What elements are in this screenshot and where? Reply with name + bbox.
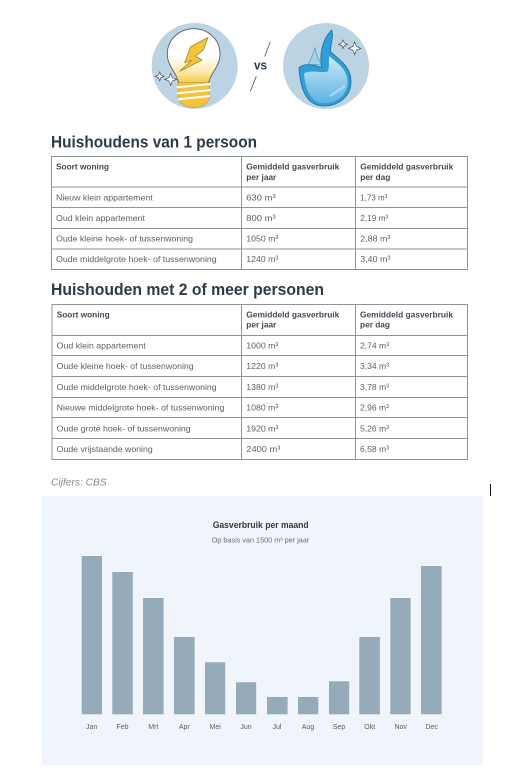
bar chart xyxy=(82,556,442,714)
table: households of 1 person: 2,19 m³ xyxy=(360,213,388,223)
table: households of 2 or more: 3,34 m³ xyxy=(360,361,389,371)
month labels: Apr xyxy=(179,724,190,731)
table: households of 2 or more: 1080 m³ xyxy=(246,403,278,413)
table: households of 1 person: per jaar xyxy=(246,172,277,182)
table: households of 2 or more: 1220 m³ xyxy=(246,361,278,371)
table: households of 2 or more: per jaar xyxy=(246,320,277,330)
chart title: Gasverbruik per maand xyxy=(213,520,309,530)
table: households of 2 or more: 3,78 m³ xyxy=(360,382,389,392)
table: households of 2 or more: Oude middelgrote hoek- of tussenwoning xyxy=(57,382,217,392)
month labels: Mei xyxy=(210,724,221,731)
cursor mark xyxy=(490,484,491,496)
table: households of 1 person: 1240 m³ xyxy=(246,254,278,264)
table: households of 1 person: 2,88 m³ xyxy=(360,234,390,244)
month labels: Jun xyxy=(240,724,252,731)
table: households of 1 person: Soort woning xyxy=(56,162,109,172)
table: households of 1 person: Gemiddeld gasverbruik xyxy=(360,162,454,172)
table: households of 1 person: per dag xyxy=(360,172,390,182)
icon: vs divider xyxy=(250,42,270,91)
table: households of 2 or more: 2,96 m³ xyxy=(360,403,389,413)
table: households of 2 or more: Gemiddeld gasverbruik xyxy=(360,309,453,319)
table: households of 2 or more: Oud klein appartement xyxy=(57,341,146,351)
table: households of 2 or more: 2400 m³ xyxy=(246,444,280,454)
table: households of 1 person: 1050 m³ xyxy=(246,234,278,244)
table: households of 2 or more: Oude vrijstaande woning xyxy=(57,444,153,454)
table: households of 2 or more xyxy=(52,304,468,460)
month labels: Feb xyxy=(116,724,129,731)
icon: gas flame xyxy=(283,23,369,109)
icon: light bulb xyxy=(152,23,238,109)
month labels: Jul xyxy=(273,724,282,731)
table: households of 1 person: 1,73 m³ xyxy=(360,192,387,202)
heading: households of 2 or more: Huishouden met 2 of meer personen xyxy=(51,281,324,299)
table: households of 1 person: 800 m³ xyxy=(246,213,276,223)
month labels: Dec xyxy=(425,724,438,731)
table: households of 1 person: 630 m³ xyxy=(246,192,276,202)
heading: households of 1 person: Huishoudens van 1 persoon xyxy=(51,134,257,152)
month labels: Okt xyxy=(364,724,375,731)
table: households of 1 person: Oud klein appartement xyxy=(56,213,146,223)
chart subtitle: Op basis van 1500 m³ per jaar xyxy=(212,535,310,544)
table: households of 2 or more: 5,26 m³ xyxy=(360,424,389,434)
table: households of 1 person: Gemiddeld gasverbruik xyxy=(246,162,340,172)
month labels xyxy=(86,724,438,731)
table: households of 2 or more: Soort woning xyxy=(57,309,110,319)
table: households of 1 person: 3,40 m³ xyxy=(360,254,390,264)
month labels: Aug xyxy=(302,724,314,731)
table: households of 2 or more: Gemiddeld gasverbruik xyxy=(246,309,340,319)
table: households of 2 or more: 2,74 m³ xyxy=(360,341,389,351)
month labels: Sep xyxy=(333,724,345,731)
table: households of 1 person: Oude kleine hoek- of tussenwoning xyxy=(56,234,193,244)
table: households of 1 person: Nieuw klein appartement xyxy=(56,192,153,202)
month labels: Mrt xyxy=(148,724,158,731)
table: households of 2 or more: 1920 m³ xyxy=(246,424,278,434)
icon: vs divider: vs xyxy=(254,57,267,72)
table: households of 2 or more: Nieuwe middelgrote hoek- of tussenwoning xyxy=(57,403,225,413)
table: households of 2 or more: 6,58 m³ xyxy=(360,444,389,454)
table: households of 1 person xyxy=(52,156,468,270)
table: households of 2 or more: 1000 m³ xyxy=(246,341,278,351)
month labels: Nov xyxy=(394,724,407,731)
table: households of 1 person: Oude middelgrote hoek- of tussenwoning xyxy=(56,254,217,264)
panel: monthly gas use chart xyxy=(42,496,483,765)
table: households of 2 or more: Oude grote hoek- of tussenwoning xyxy=(57,424,191,434)
table: households of 2 or more: Oude kleine hoek- of tussenwoning xyxy=(57,361,194,371)
source note: Cijfers: CBS xyxy=(51,476,107,488)
table: households of 2 or more: per dag xyxy=(360,320,390,330)
month labels: Jan xyxy=(86,724,97,731)
table: households of 2 or more: 1380 m³ xyxy=(246,382,278,392)
